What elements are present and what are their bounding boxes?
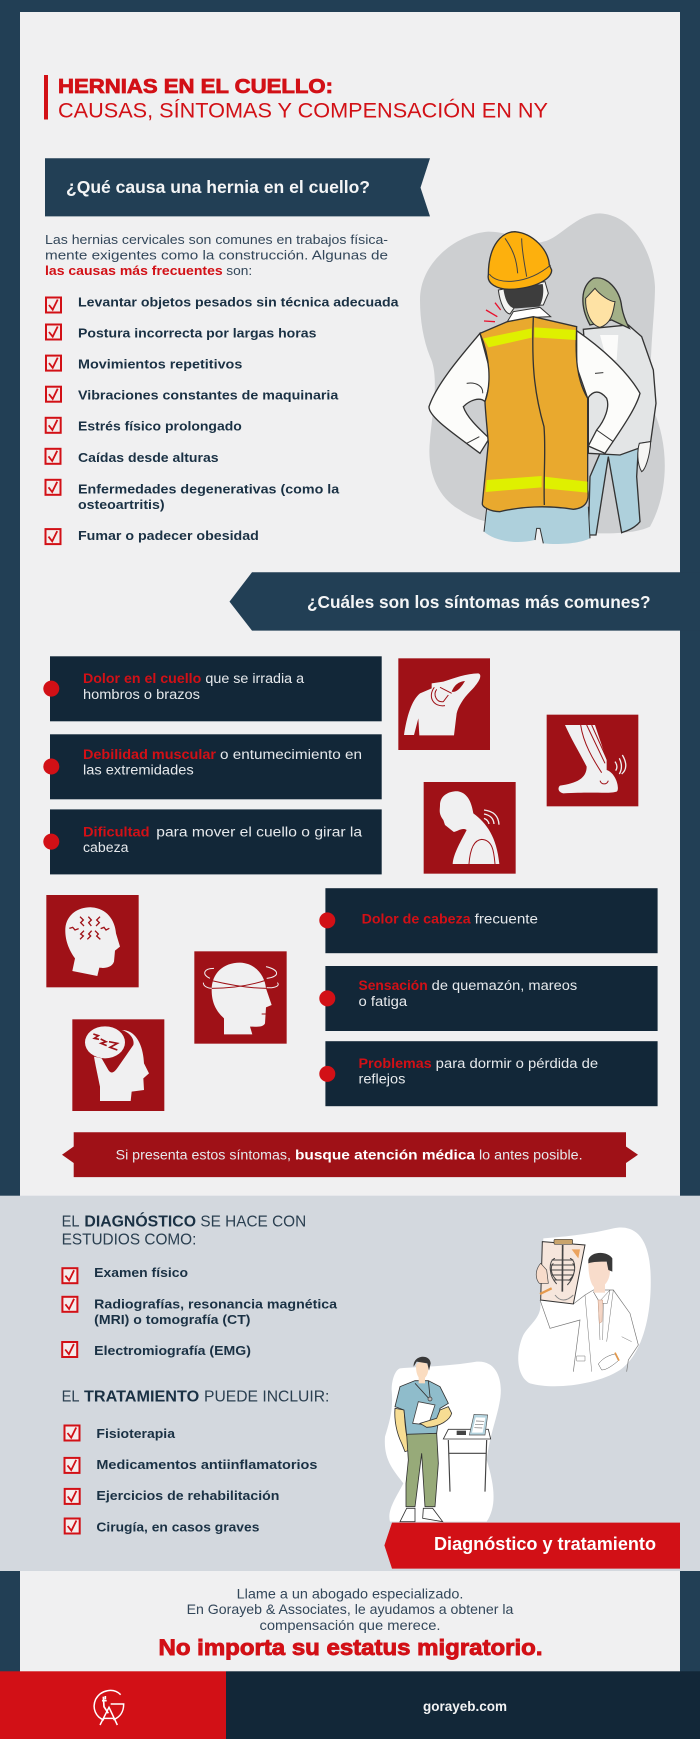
symptom card: burning and dizziness: Sensación — [358, 978, 428, 993]
symptom card: sleep and reflexes — [319, 1041, 658, 1106]
icon: sleep problems — [72, 1019, 164, 1111]
icon: ankle and leg pain — [547, 715, 638, 806]
heading: diagnosis: DIAGNÓSTICO — [84, 1211, 196, 1230]
symptom card: sleep and reflexes: reflejos — [358, 1072, 406, 1087]
symptom card: burning and dizziness: de quemazón, mareos — [432, 978, 577, 993]
footer: logo block — [0, 1671, 226, 1739]
banner: causes heading — [45, 158, 430, 216]
checklist: causes: Levantar objetos pesados sin técnica adecuada — [78, 294, 399, 309]
symptom card: muscle weakness: las extremidades — [83, 762, 194, 777]
title — [44, 75, 548, 122]
heading: treatment: EL — [62, 1388, 80, 1405]
checklist: diagnosis: Electromiografía (EMG) — [94, 1343, 251, 1358]
intro paragraph: mente exigentes como la construcción. Algunas de — [45, 248, 388, 263]
panel: call to action: Llame a un abogado especializado. — [237, 1586, 463, 1602]
heading: diagnosis: EL — [62, 1213, 80, 1230]
banner: symptoms heading: ¿Cuáles son los síntomas más comunes? — [307, 592, 650, 612]
checklist: causes: Enfermedades degenerativas (como la — [78, 482, 340, 496]
banner: diagnosis and treatment: Diagnóstico y tratamiento — [434, 1534, 656, 1554]
symptom card: burning and dizziness: o fatiga — [358, 994, 408, 1009]
symptom card: difficulty moving — [43, 809, 382, 874]
checklist: causes: Postura incorrecta por largas horas — [78, 325, 316, 340]
panel: call to action — [20, 1571, 680, 1672]
symptom card: neck pain: hombros o brazos — [83, 687, 200, 702]
panel: call to action: compensación que merece. — [260, 1617, 440, 1633]
heading: treatment: TRATAMIENTO — [84, 1388, 199, 1405]
illustration: worker with neck pain and colleague — [420, 213, 665, 544]
footer: website: gorayeb.com — [423, 1699, 507, 1714]
checklist: causes: Estrés físico prolongado — [78, 419, 242, 434]
heading: diagnosis: ESTUDIOS COMO: — [62, 1232, 196, 1248]
checklist: diagnosis: Radiografías, resonancia magnética — [94, 1296, 338, 1311]
checklist: causes: Movimientos repetitivos — [78, 356, 242, 372]
heading: diagnosis: SE HACE CON — [200, 1213, 306, 1230]
title: HERNIAS EN EL CUELLO: — [58, 75, 333, 98]
symptom card: difficulty moving: Dificultad — [83, 824, 150, 839]
heading: treatment: PUEDE INCLUIR: — [204, 1388, 329, 1405]
footer: website — [226, 1671, 700, 1739]
callout: seek medical attention: busque atención médica — [295, 1148, 476, 1163]
checklist: treatment: Medicamentos antiinflamatorios — [96, 1457, 317, 1472]
checklist: causes — [46, 294, 399, 544]
symptom card: muscle weakness: o entumecimiento en — [220, 747, 362, 762]
illustration: doctor reading an x-ray — [518, 1227, 651, 1386]
checklist: causes: osteoartritis) — [78, 497, 165, 512]
heading: treatment — [62, 1388, 329, 1405]
checklist: diagnosis — [62, 1265, 338, 1358]
panel: call to action: No importa su estatus migratorio. — [158, 1635, 542, 1660]
checklist: treatment: Ejercicios de rehabilitación — [96, 1488, 279, 1503]
symptom card: burning and dizziness — [319, 966, 658, 1031]
banner: symptoms heading — [230, 572, 700, 631]
intro paragraph: son: — [226, 263, 252, 278]
symptom card: headache — [319, 888, 658, 953]
symptom card: headache: frecuente — [475, 912, 538, 927]
heading: diagnosis — [62, 1211, 306, 1248]
title: CAUSAS, SÍNTOMAS Y COMPENSACIÓN EN NY — [58, 99, 548, 122]
checklist: causes: Fumar o padecer obesidad — [78, 528, 259, 543]
intro paragraph: las causas más frecuentes — [45, 263, 223, 278]
icon: dizziness — [194, 951, 287, 1044]
banner: diagnosis and treatment — [384, 1523, 680, 1569]
symptom card: neck pain — [43, 656, 382, 721]
illustration: medic with clipboard and table — [385, 1357, 501, 1522]
callout: seek medical attention: lo antes posible. — [479, 1148, 583, 1163]
symptom card: sleep and reflexes: Problemas — [358, 1056, 432, 1071]
symptom card: headache: Dolor de cabeza — [362, 912, 471, 927]
checklist: causes: Vibraciones constantes de maquinaria — [78, 388, 339, 403]
checklist: treatment: Fisioterapia — [96, 1426, 176, 1441]
intro paragraph — [45, 232, 388, 278]
callout: seek medical attention — [62, 1132, 638, 1177]
checklist: causes: Caídas desde alturas — [78, 450, 219, 465]
symptom card: muscle weakness — [43, 734, 382, 799]
callout: seek medical attention: Si presenta estos síntomas, — [116, 1148, 291, 1163]
checklist: diagnosis: Examen físico — [94, 1265, 188, 1280]
symptom card: muscle weakness: Debilidad muscular — [83, 747, 217, 762]
checklist: diagnosis: (MRI) o tomografía (CT) — [94, 1312, 250, 1327]
symptom card: neck pain: Dolor en el cuello — [83, 671, 201, 686]
symptom card: sleep and reflexes: para dormir o pérdida de — [436, 1056, 598, 1071]
banner: causes heading: ¿Qué causa una hernia en el cuello? — [66, 177, 370, 197]
panel: call to action: En Gorayeb & Associates, le ayudamos a obtener la — [187, 1601, 514, 1617]
main light panel — [20, 12, 680, 1202]
checklist: treatment: Cirugía, en casos graves — [96, 1520, 259, 1534]
panel: diagnosis and treatment background — [0, 1196, 700, 1571]
symptom card: difficulty moving: para mover el cuello o girar la — [156, 824, 363, 839]
icon: headache — [46, 895, 139, 987]
icon: hand on shoulder — [398, 658, 490, 750]
symptom card: difficulty moving: cabeza — [83, 840, 129, 855]
intro paragraph: Las hernias cervicales son comunes en trabajos física- — [45, 232, 388, 247]
symptom card: neck pain: que se irradia a — [205, 671, 305, 686]
checklist: treatment — [64, 1426, 317, 1534]
icon: hunched neck — [424, 782, 516, 874]
